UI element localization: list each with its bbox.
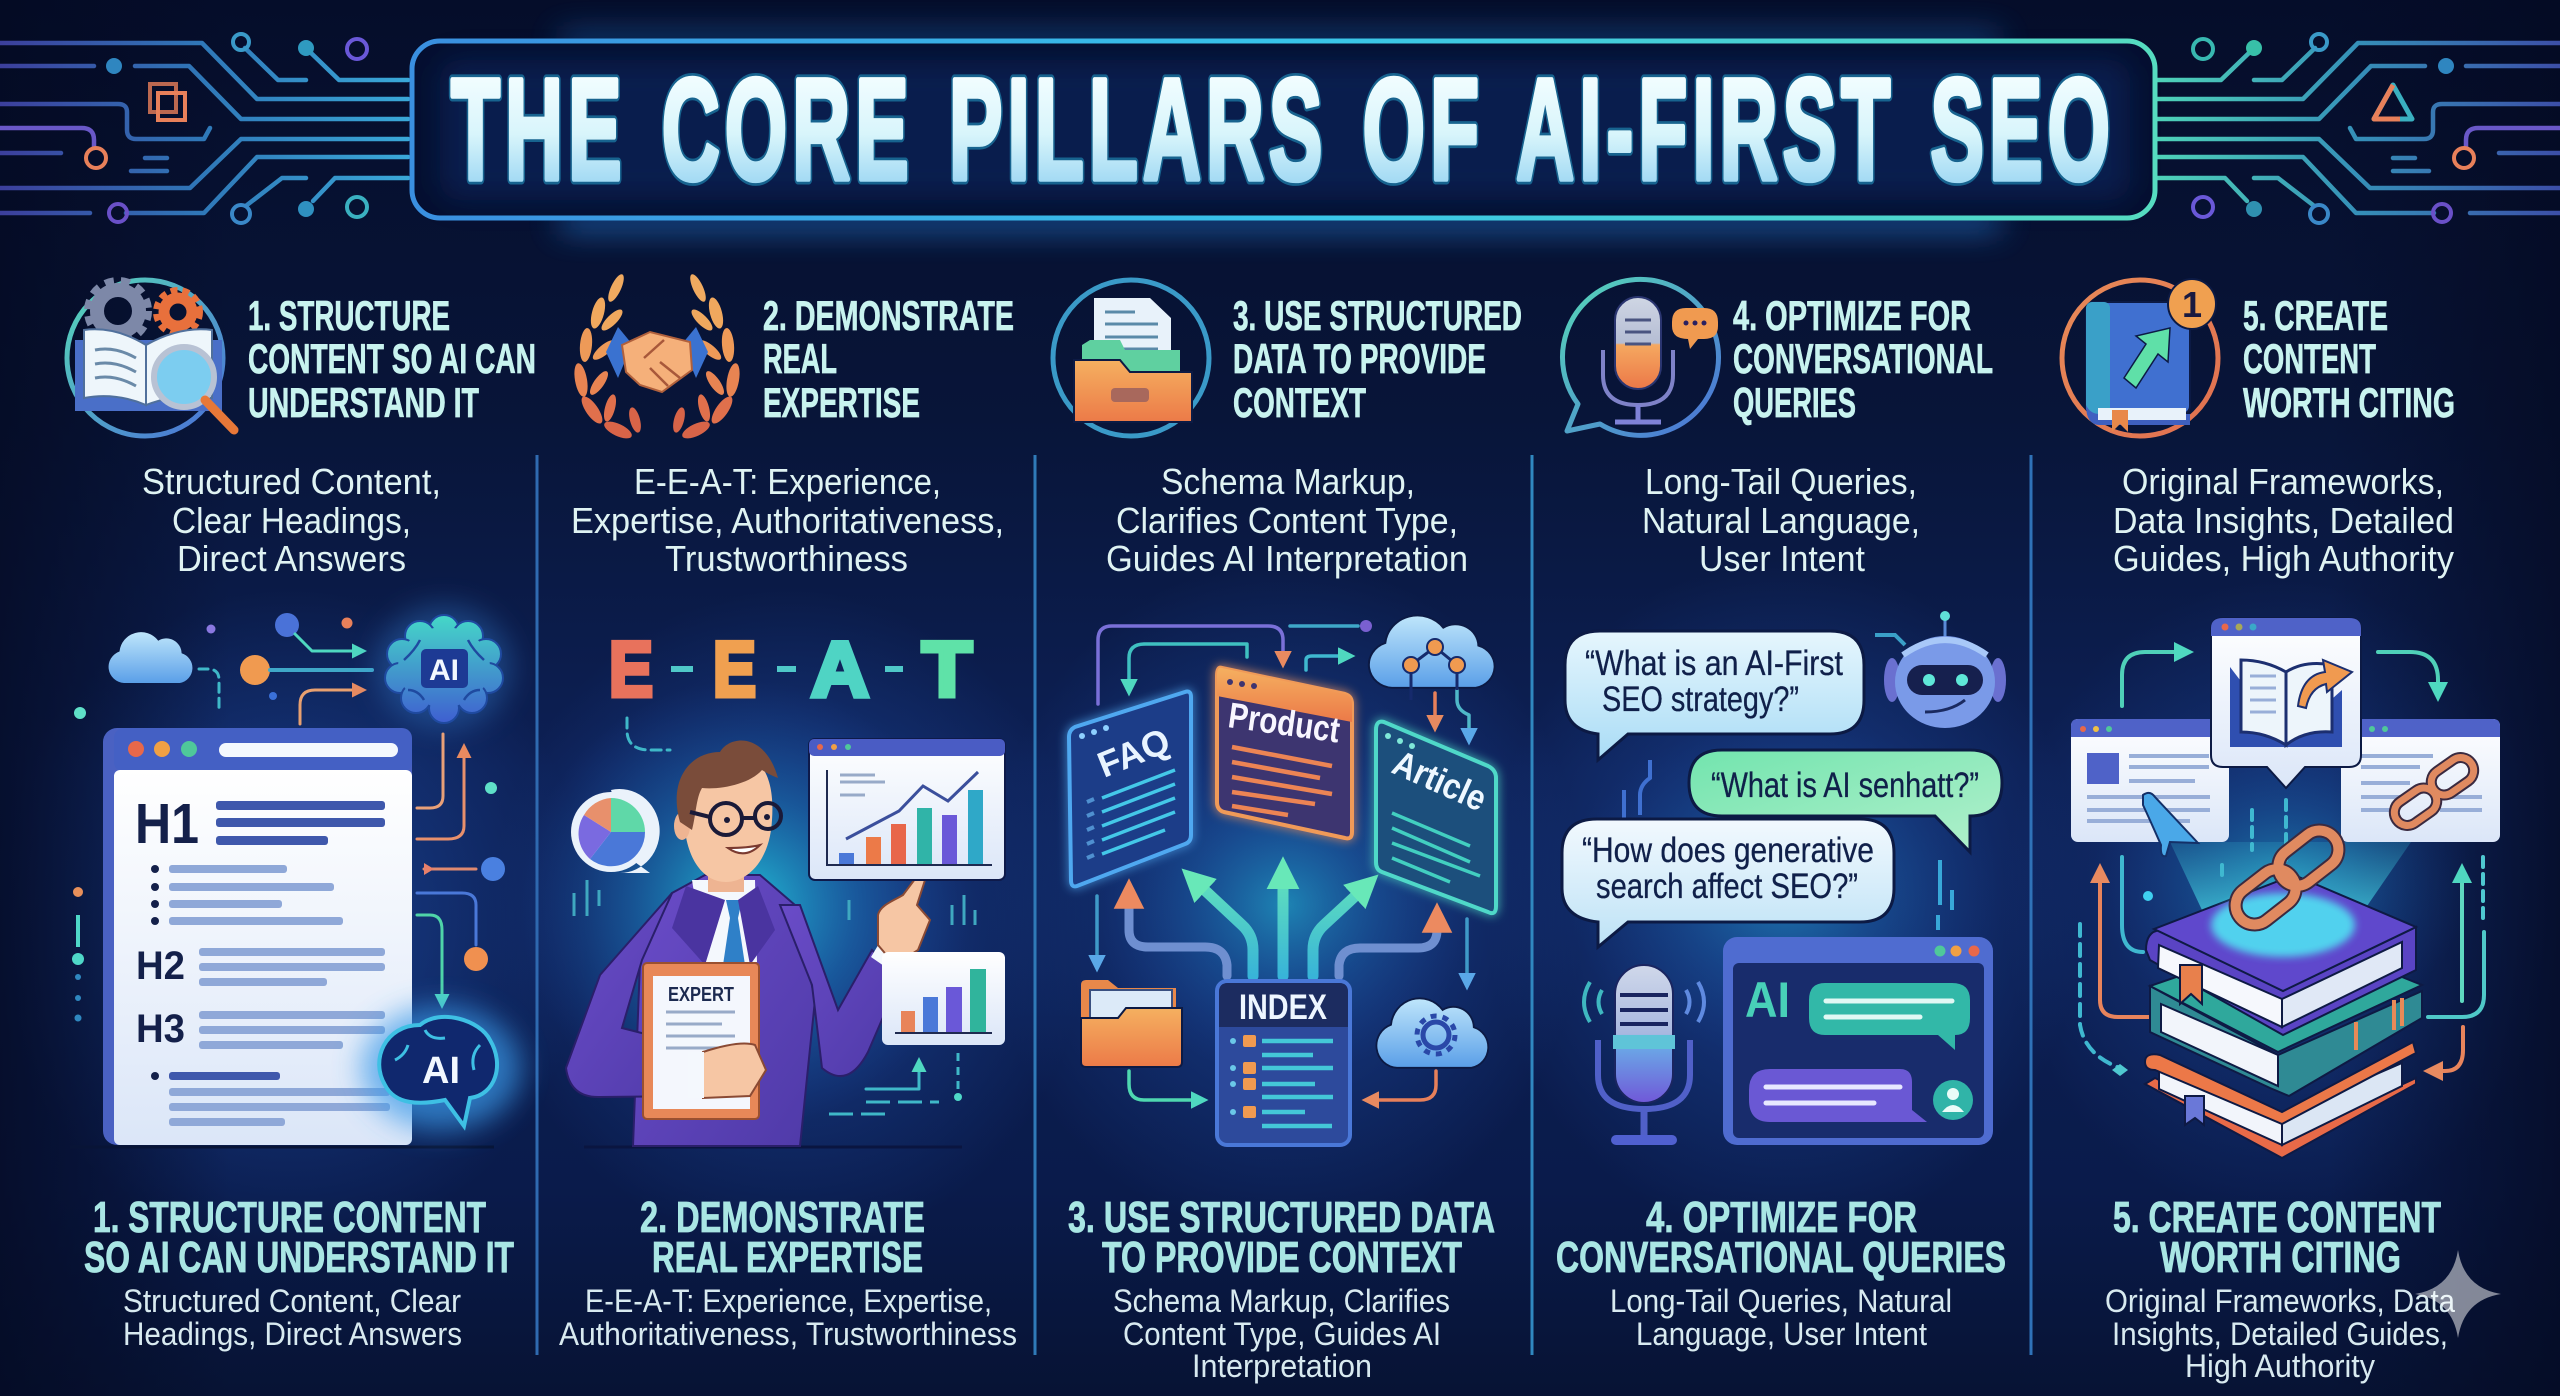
text block <box>1642 461 1920 579</box>
icon: chain link center <box>2228 823 2346 932</box>
icon: triangle <box>2374 85 2412 119</box>
text block: Original Frameworks, <box>2122 461 2444 502</box>
speech bubble: third question: search affect SEO?” <box>1596 867 1858 906</box>
browser window: H2 <box>136 944 185 988</box>
glow on book <box>2211 893 2355 957</box>
heading: 5. CREATE <box>2243 292 2388 339</box>
illustration: structured web page with AI brains <box>70 605 521 1147</box>
card: FAQ <box>1069 692 1191 886</box>
heading: QUERIES <box>1733 379 1856 426</box>
icon: network cloud <box>1369 615 1495 700</box>
icon: book, gears and magnifier <box>67 280 234 436</box>
heading: 2. DEMONSTRATE <box>763 292 1014 339</box>
caption text: Interpretation <box>1192 1348 1372 1384</box>
caption heading: REAL EXPERTISE <box>652 1233 923 1282</box>
illustration: structured data flow <box>1069 615 1496 1145</box>
icon: file drawer <box>1053 280 1209 436</box>
icon: AI brain bottom: AI <box>422 1050 460 1092</box>
caption heading: 5. CREATE CONTENT <box>2113 1193 2441 1242</box>
caption text <box>123 1283 462 1352</box>
icon: folder <box>1081 980 1182 1067</box>
text block <box>142 461 441 579</box>
caption heading: TO PROVIDE CONTEXT <box>1102 1233 1462 1282</box>
heading: 4. OPTIMIZE FOR <box>1733 292 1971 339</box>
text block: Structured Content, <box>142 461 441 502</box>
text block: Guides, High Authority <box>2113 538 2454 579</box>
E-E-A-T letters: T <box>922 625 972 713</box>
panel: pillar 4 <box>1556 279 2006 1352</box>
icon: studio microphone <box>1584 965 1704 1145</box>
caption text <box>1610 1283 1952 1352</box>
center window <box>2211 618 2361 788</box>
heading: 3. USE STRUCTURED <box>1233 292 1522 339</box>
AI chat window <box>1723 937 1993 1145</box>
heading: CONVERSATIONAL <box>1733 335 1993 382</box>
caption text: Long-Tail Queries, Natural <box>1610 1283 1952 1319</box>
speech bubble: green <box>1689 750 2002 852</box>
icon: chain link <box>2389 752 2479 831</box>
caption text: Insights, Detailed Guides, <box>2112 1316 2448 1352</box>
icon: AI brain top <box>376 605 512 729</box>
icon: AI brain top: AI <box>429 654 459 687</box>
text block: Expertise, Authoritativeness, <box>571 500 1004 541</box>
text block: Long-Tail Queries, <box>1645 461 1917 502</box>
caption heading <box>1556 1193 2006 1282</box>
text block: Clear Headings, <box>172 500 411 541</box>
panel: pillar 1 <box>67 280 536 1352</box>
card: Article <box>1376 722 1496 913</box>
icon: overlapping squares <box>150 84 185 120</box>
text block: Data Insights, Detailed <box>2113 500 2454 541</box>
caption text: Content Type, Guides AI <box>1123 1316 1441 1352</box>
caption text <box>1113 1283 1450 1384</box>
character: expert: EXPERT <box>668 984 734 1006</box>
icon: gear cloud <box>1376 998 1488 1068</box>
heading: DATA TO PROVIDE <box>1233 335 1486 382</box>
text block: Guides AI Interpretation <box>1106 538 1468 579</box>
small chart <box>882 952 1005 1045</box>
books stack <box>2145 875 2422 1158</box>
heading: CONTENT <box>2243 335 2376 382</box>
caption heading: 1. STRUCTURE CONTENT <box>93 1193 486 1242</box>
heading: CONTENT SO AI CAN <box>248 335 536 382</box>
text block: Natural Language, <box>1642 500 1920 541</box>
card: Product <box>1217 668 1352 838</box>
arrows: from index <box>1129 876 1437 976</box>
caption text: Original Frameworks, Data <box>2105 1283 2455 1319</box>
text block <box>2113 461 2454 579</box>
illustration: expert presenting charts <box>520 625 1005 1147</box>
heading <box>2243 292 2455 426</box>
caption heading <box>1068 1193 1495 1282</box>
heading <box>248 292 536 426</box>
heading: CONTEXT <box>1233 379 1366 426</box>
caption text: High Authority <box>2185 1348 2375 1384</box>
panel: pillar 3 <box>1053 280 1522 1384</box>
light beam <box>2170 842 2411 925</box>
speech bubble: first question: “What is an AI-First <box>1585 644 1843 683</box>
title banner <box>412 36 2155 228</box>
arrows: connector lines <box>1097 626 1469 1100</box>
left window <box>2071 719 2229 856</box>
text block: E-E-A-T: Experience, <box>634 461 941 502</box>
circuit decoration left <box>0 34 408 223</box>
caption text: Headings, Direct Answers <box>123 1316 462 1352</box>
E-E-A-T letters: A <box>811 625 869 713</box>
browser window <box>103 728 412 1145</box>
heading <box>1733 292 1993 426</box>
arrows <box>2080 652 2484 1071</box>
text block: Clarifies Content Type, <box>1116 500 1458 541</box>
index panel: INDEX <box>1239 988 1328 1027</box>
heading: WORTH CITING <box>2243 379 2455 426</box>
text block: Schema Markup, <box>1161 461 1415 502</box>
E-E-A-T letters: E <box>713 625 756 713</box>
speech bubble: first question <box>1565 631 1864 760</box>
chart window <box>809 739 1005 880</box>
card: FAQ: FAQ <box>1092 720 1176 785</box>
text block <box>571 461 1004 579</box>
icon: pie chart bubble <box>571 789 660 873</box>
caption text: Authoritativeness, Trustworthiness <box>559 1316 1017 1352</box>
icon: microphone with speech ring <box>1563 279 1719 435</box>
text block: User Intent <box>1699 538 1865 579</box>
caption text: E-E-A-T: Experience, Expertise, <box>585 1283 992 1319</box>
caption heading: WORTH CITING <box>2160 1233 2401 1282</box>
caption text: Structured Content, Clear <box>123 1283 461 1319</box>
speech bubble: first question: SEO strategy?” <box>1602 680 1799 719</box>
caption heading: 4. OPTIMIZE FOR <box>1646 1193 1917 1242</box>
caption text: Language, User Intent <box>1636 1316 1927 1352</box>
AI chat window: AI <box>1745 972 1790 1028</box>
caption heading: 3. USE STRUCTURED DATA <box>1068 1193 1495 1242</box>
text block: Direct Answers <box>177 538 406 579</box>
book: bottom orange <box>2145 1042 2416 1158</box>
caption heading <box>84 1193 514 1282</box>
right window <box>2341 719 2500 842</box>
icon: robot <box>1884 611 2006 728</box>
heading: REAL <box>763 335 837 382</box>
illustration: conversational queries <box>1562 611 2006 1145</box>
browser window: H1 <box>135 792 199 856</box>
text block <box>1106 461 1468 579</box>
column dividers <box>537 455 2031 1355</box>
E-E-A-T letters: E <box>609 625 653 713</box>
heading: UNDERSTAND IT <box>248 379 479 426</box>
caption heading: 2. DEMONSTRATE <box>640 1193 925 1242</box>
card: Article: Article <box>1387 742 1493 819</box>
icon: book with badge: 1 <box>2182 284 2202 325</box>
heading: 1. STRUCTURE <box>248 292 450 339</box>
book: top purple <box>2146 875 2416 1035</box>
icon: AI brain bottom <box>361 1006 521 1130</box>
index panel <box>1217 981 1350 1145</box>
heading <box>763 292 1014 426</box>
icon: book with badge <box>2062 279 2218 436</box>
caption text: Schema Markup, Clarifies <box>1113 1283 1450 1319</box>
text block: Trustworthiness <box>665 538 908 579</box>
speech bubble: third question: “How does generative <box>1582 831 1874 870</box>
caption text <box>2105 1283 2455 1384</box>
caption text <box>559 1283 1017 1352</box>
panel: pillar 2 <box>520 272 1017 1352</box>
character: expert <box>566 741 930 1146</box>
card: Product: Product <box>1226 694 1343 751</box>
book: middle teal <box>2150 935 2422 1096</box>
heading: EXPERTISE <box>763 379 920 426</box>
speech bubble: third question <box>1562 819 1894 947</box>
caption heading: CONVERSATIONAL QUERIES <box>1556 1233 2006 1282</box>
heading <box>1233 292 1522 426</box>
browser window: H3 <box>136 1007 185 1051</box>
speech bubble: green: “What is AI senhatt?” <box>1711 766 1979 805</box>
caption heading <box>2113 1193 2441 1282</box>
caption heading <box>640 1193 925 1282</box>
E-E-A-T letters <box>609 625 972 713</box>
icon: laurel wreath and handshake <box>572 272 742 442</box>
caption heading: SO AI CAN UNDERSTAND IT <box>84 1233 514 1282</box>
illustration: citations and books <box>2071 618 2500 1158</box>
icon: sparkle watermark <box>2415 1250 2501 1338</box>
panel: pillar 5 <box>2062 279 2500 1384</box>
circuit decoration right <box>2152 34 2560 223</box>
